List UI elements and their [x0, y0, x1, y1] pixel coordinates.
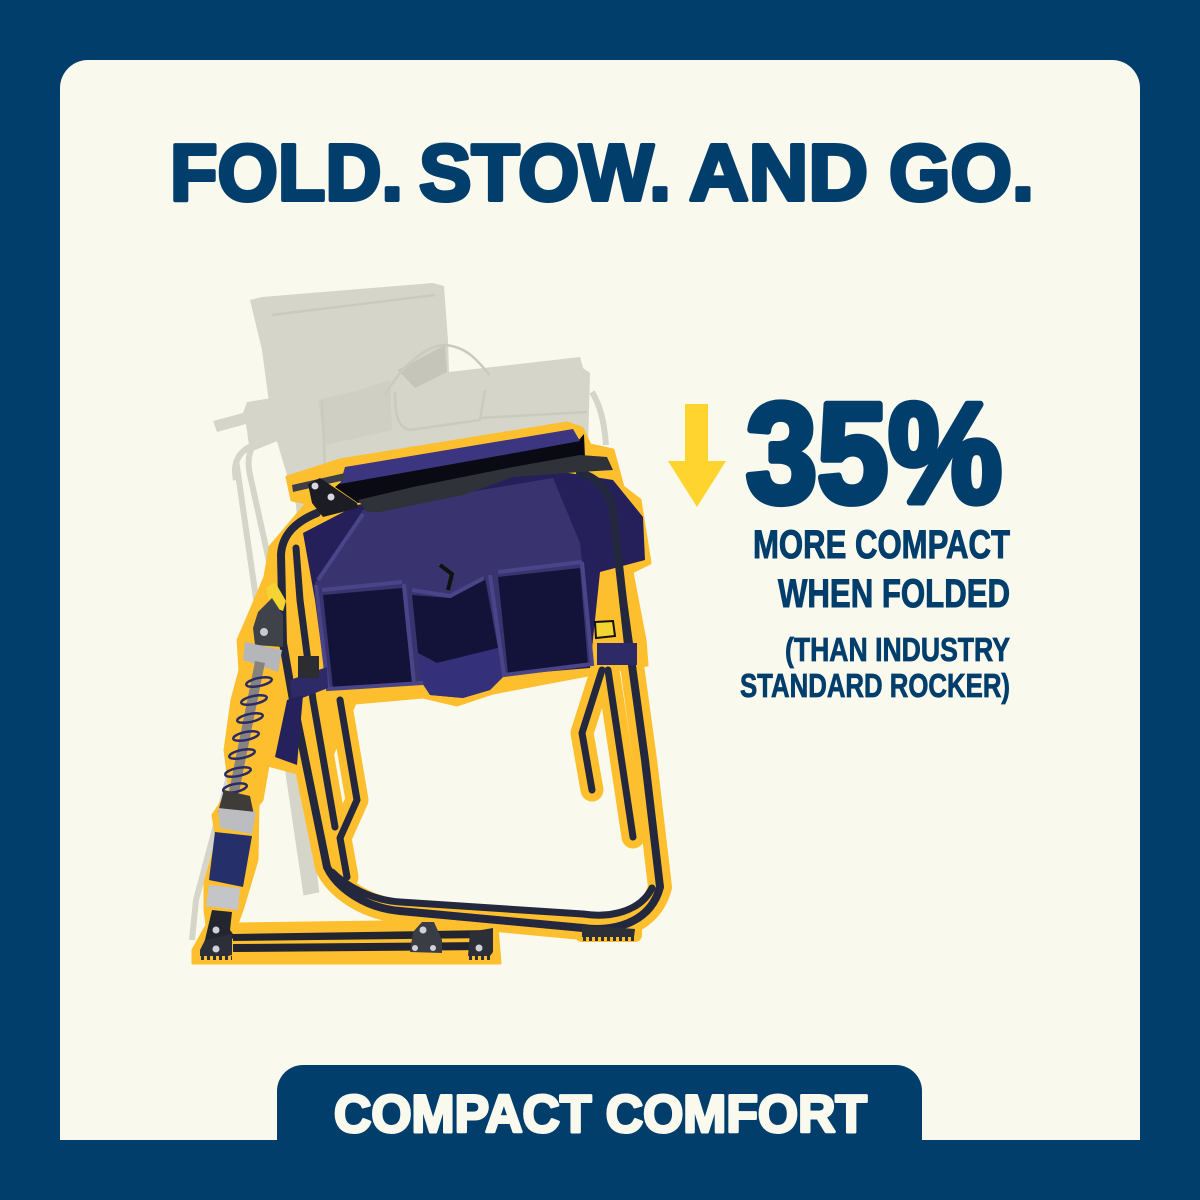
pivot bracket [204, 910, 236, 944]
rod [233, 662, 260, 797]
stat footnote: (THAN INDUSTRY [785, 631, 1010, 668]
coil spring [222, 675, 273, 794]
stat caption [753, 523, 1010, 616]
title [170, 128, 1034, 217]
yellow buckle [266, 582, 286, 611]
rear fabric [303, 470, 645, 690]
title: AND [689, 128, 868, 217]
spring column [204, 598, 283, 944]
right tube over fabric [580, 473, 628, 645]
top seat flap [292, 429, 585, 503]
chair illustration [192, 283, 660, 963]
tubular frame [281, 513, 660, 929]
yellow tag [595, 621, 615, 638]
stat footnote: STANDARD ROCKER) [740, 667, 1010, 704]
stat footnote [740, 631, 1010, 704]
ghost: unfolded standard chair [192, 283, 606, 940]
title: STOW. [419, 128, 671, 217]
footer tab [277, 1065, 922, 1140]
stat: 35%: 35% [746, 374, 1002, 533]
feet [200, 934, 232, 956]
title: GO. [889, 128, 1034, 217]
footer label: COMPACT COMFORT [334, 1085, 867, 1144]
lower collar [218, 790, 254, 815]
knuckle [253, 598, 283, 647]
navy sleeve [209, 832, 252, 887]
bottom collar [206, 885, 240, 910]
down arrow [668, 404, 726, 507]
pockets [323, 568, 588, 688]
yellow outline of folded chair [193, 423, 660, 963]
armrest [358, 455, 613, 512]
side straps [290, 667, 328, 702]
title: FOLD. [170, 128, 403, 217]
hinge plate [308, 478, 358, 517]
top collar [243, 642, 282, 672]
stat caption: WHEN FOLDED [778, 572, 1010, 616]
base rail [200, 922, 635, 958]
frame block [298, 656, 319, 678]
main back panel [315, 478, 593, 698]
zipper pull [440, 565, 452, 590]
seat fabric with pockets [266, 470, 645, 765]
pocket trim [418, 648, 503, 698]
stat caption: MORE COMPACT [753, 523, 1010, 567]
